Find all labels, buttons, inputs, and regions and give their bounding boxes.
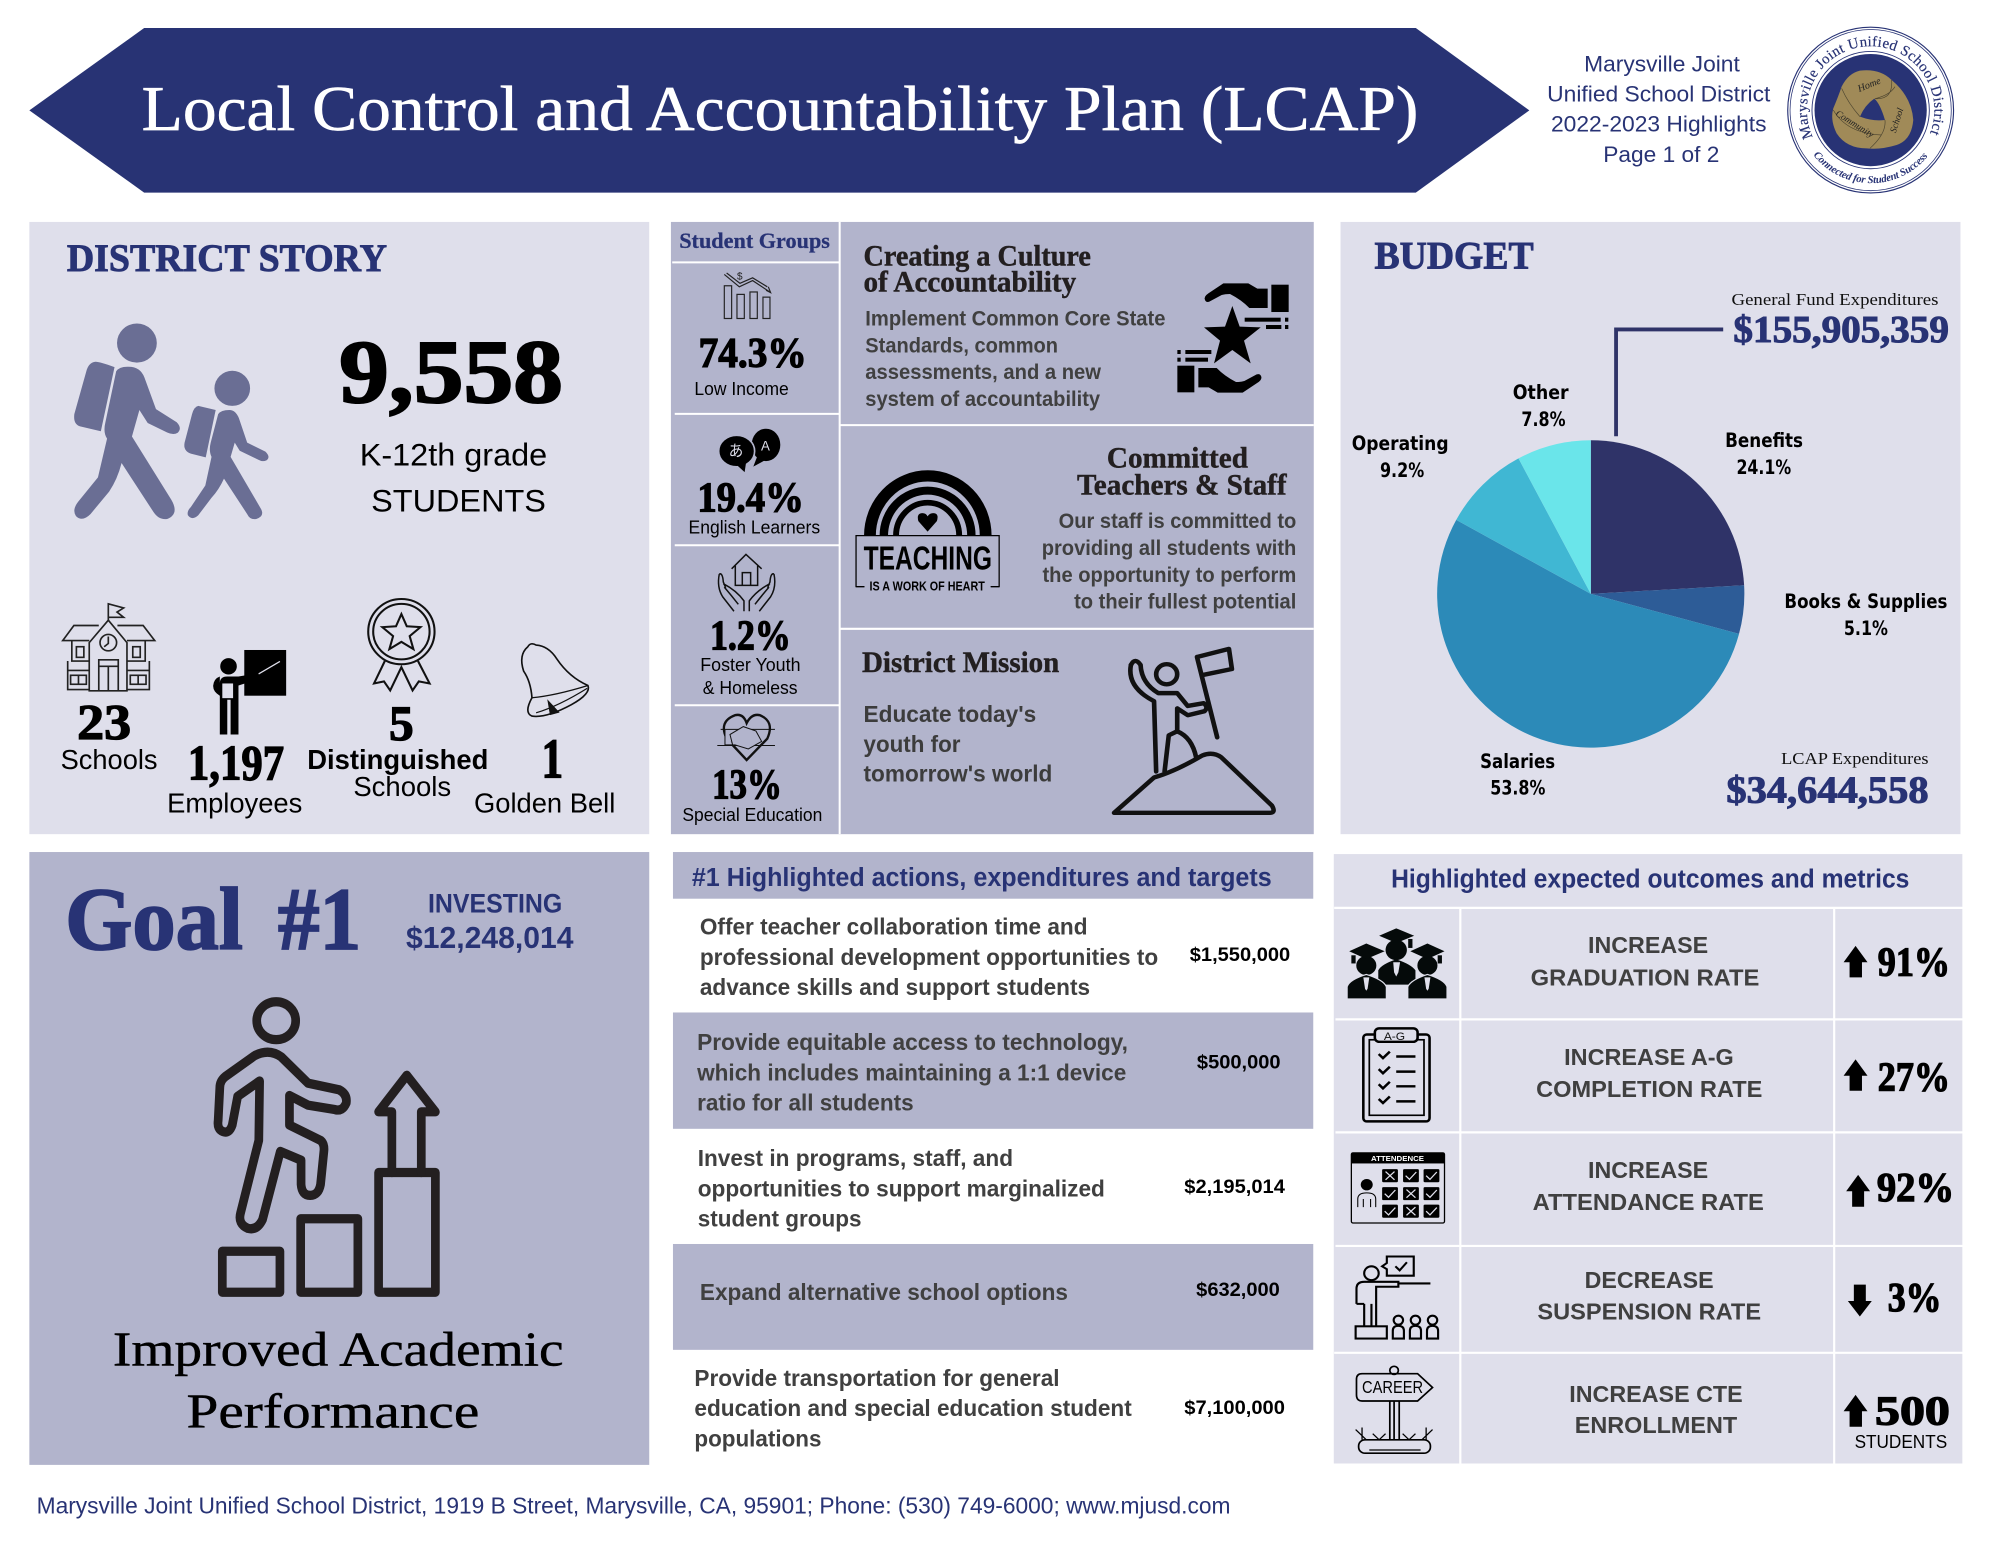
gold trefoil knot: Community — [1833, 109, 1876, 141]
icon: career signpost — [1356, 1366, 1433, 1453]
panel: district story — [29, 222, 649, 834]
metric: attendance rate: ATTENDANCE RATE — [1533, 1189, 1764, 1215]
action row 1: advance skills and support students — [700, 974, 1090, 1000]
block: culture of accountability — [864, 240, 1165, 411]
lcap expenditures — [1726, 749, 1929, 811]
action row 4: Expand alternative school options — [700, 1279, 1068, 1305]
action row 1: Offer teacher collaboration time and — [700, 913, 1087, 939]
stat: total students: 9,558 — [339, 321, 563, 422]
pie labels: Other — [1513, 381, 1569, 404]
lcap expenditures: LCAP Expenditures — [1781, 749, 1929, 768]
action row 5 — [694, 1365, 1285, 1451]
icon: climber with flag on mountain — [1114, 649, 1274, 813]
lcap expenditures: $34,644,558 — [1726, 769, 1929, 811]
action row 4 — [673, 1244, 1313, 1350]
icon: teaching is a work of heart: IS A WORK OF HEART — [870, 579, 985, 593]
stat: special education: Special Education — [682, 804, 822, 825]
block: district mission: youth for — [864, 731, 961, 757]
general fund expenditures: General Fund Expenditures — [1731, 290, 1939, 309]
goal heading: Goal — [65, 870, 243, 969]
pie labels: 53.8% — [1490, 777, 1545, 800]
stat: golden bell: Golden Bell — [474, 787, 615, 818]
stat: total students: STUDENTS — [371, 483, 546, 519]
stat: distinguished schools: Distinguished — [307, 744, 488, 775]
district name block: 2022-2023 Highlights — [1551, 111, 1767, 136]
pie chart: expenditures — [1437, 440, 1744, 748]
icon: language speech bubbles — [719, 429, 780, 472]
stat: schools — [61, 695, 158, 775]
district name block: Unified School District — [1547, 81, 1770, 106]
panel: student groups and commitments — [671, 222, 1314, 834]
stat: foster youth and homeless: 1.2% — [710, 613, 791, 660]
block: culture of accountability: assessments, and a new — [865, 361, 1102, 384]
pie labels: 7.8% — [1521, 408, 1566, 431]
action row 2: which includes maintaining a 1:1 device — [696, 1060, 1126, 1086]
block: culture of accountability: Creating a Culture — [864, 240, 1091, 272]
value: 91 percent up — [1844, 940, 1950, 985]
action row 2 — [673, 1012, 1313, 1129]
panel: budget — [1341, 222, 1960, 834]
heading: budget: BUDGET — [1374, 233, 1534, 277]
block: district mission — [862, 647, 1059, 786]
metric: graduation rate: INCREASE — [1588, 932, 1708, 958]
action row 2: Provide equitable access to technology, — [697, 1029, 1128, 1055]
actions heading bar — [673, 852, 1313, 899]
icon: low income chart: $ — [737, 271, 743, 283]
stat: special education — [682, 761, 822, 825]
block: committed teachers and staff: Our staff is committed to — [1059, 510, 1296, 533]
metric: attendance rate — [1533, 1157, 1764, 1215]
stat: low income: Low Income — [694, 378, 789, 399]
block: culture of accountability: Standards, common — [865, 334, 1058, 357]
pie labels: 5.1% — [1844, 617, 1888, 640]
actions heading bar: #1 Highlighted actions, expenditures and targets — [692, 864, 1272, 892]
stat: total students — [339, 321, 563, 519]
value: 500 students up — [1844, 1389, 1950, 1452]
goal description — [113, 1324, 564, 1438]
metric: a-g completion rate — [1536, 1044, 1762, 1102]
block: committed teachers and staff: Teachers & Staff — [1077, 469, 1288, 501]
pie labels: Operating — [1352, 432, 1449, 455]
block: committed teachers and staff: providing all students with — [1042, 537, 1296, 560]
district seal logo: Connected for Student Success — [1814, 152, 1927, 184]
title: Local Control and Accountability Plan (LCAP) — [142, 73, 1418, 144]
icon: school building — [63, 604, 155, 691]
metric: attendance rate: INCREASE — [1588, 1157, 1708, 1183]
block: district mission: District Mission — [862, 647, 1059, 679]
stat: low income: 74.3% — [699, 330, 807, 377]
stat: employees: Employees — [167, 787, 302, 818]
stat: distinguished schools — [307, 696, 488, 802]
stat: employees: 1,197 — [188, 735, 284, 790]
gold trefoil knot — [1832, 70, 1913, 149]
value: 92 percent up — [1846, 1165, 1954, 1210]
metric: suspension rate — [1537, 1267, 1761, 1324]
stat: english learners: English Learners — [689, 517, 820, 538]
value: 500 students up: STUDENTS — [1855, 1431, 1947, 1452]
block: committed teachers and staff: the opportunity to perform — [1042, 564, 1296, 587]
block: culture of accountability: system of accountability — [865, 388, 1100, 411]
icon: a-g checklist clipboard: A-G — [1384, 1030, 1405, 1043]
metric: cte enrollment: ENROLLMENT — [1575, 1412, 1737, 1438]
icon: person climbing steps — [218, 1002, 435, 1292]
action row 5: $7,100,000 — [1184, 1397, 1285, 1419]
action row 3: $2,195,014 — [1184, 1176, 1285, 1198]
district name block — [1547, 51, 1770, 167]
stat: schools: 23 — [77, 695, 131, 750]
pie labels: 9.2% — [1380, 459, 1424, 482]
pie labels — [1352, 381, 1947, 800]
action row 3: Invest in programs, staff, and — [698, 1145, 1013, 1171]
action row 5: Provide transportation for general — [694, 1365, 1060, 1391]
icon: teaching is a work of heart — [856, 476, 999, 593]
stat: foster youth and homeless: & Homeless — [703, 677, 798, 698]
stat: english learners: 19.4% — [697, 474, 804, 521]
panel: goal 1 — [29, 852, 649, 1465]
stat: foster youth and homeless: Foster Youth — [700, 654, 801, 675]
footer contact line: Marysville Joint Unified School District, 1919 B Street, Marysville, CA, 95901; Phone: (530) 749-6000; www.mjusd.com — [37, 1493, 1230, 1519]
block: district mission: tomorrow's world — [864, 760, 1052, 786]
header banner — [29, 28, 1529, 193]
icon: heart and handshake — [717, 715, 775, 760]
block: culture of accountability: Implement Common Core State — [865, 308, 1165, 331]
stat: employees — [167, 735, 302, 818]
stat: foster youth and homeless — [700, 613, 801, 698]
panel: outcomes and metrics — [1334, 854, 1963, 1463]
icon: low income chart — [724, 271, 771, 318]
panel: highlighted actions — [673, 852, 1313, 1451]
general fund expenditures — [1731, 290, 1949, 351]
district name block: Marysville Joint — [1584, 51, 1740, 76]
action row 3 — [698, 1145, 1285, 1232]
value: 3 percent down: 3% — [1888, 1275, 1941, 1320]
icon: attendance calendar: ATTENDENCE — [1371, 1154, 1424, 1163]
icon: instructor with students — [1356, 1257, 1438, 1339]
icon: teacher at board — [213, 650, 286, 734]
general fund expenditures: $155,905,359 — [1733, 309, 1949, 351]
investing amount — [406, 889, 574, 955]
value: 27 percent up — [1844, 1055, 1950, 1100]
district seal logo: Marysville Joint Unified School District — [1799, 36, 1944, 140]
goal heading: #1 — [278, 870, 361, 969]
value: 500 students up: 500 — [1875, 1389, 1950, 1434]
stat: golden bell — [474, 728, 615, 818]
investing amount: $12,248,014 — [406, 922, 574, 955]
district seal logo — [1787, 26, 1954, 194]
pie labels: Benefits — [1725, 429, 1803, 452]
stat: total students: K-12th grade — [360, 437, 547, 473]
stat: golden bell: 1 — [541, 728, 563, 790]
value: 27 percent up: 27% — [1878, 1055, 1950, 1100]
icon: career signpost: CAREER — [1362, 1377, 1423, 1397]
pie labels: 24.1% — [1736, 456, 1791, 479]
metric: graduation rate: GRADUATION RATE — [1531, 964, 1759, 990]
icon: house in hands — [718, 554, 775, 611]
icon: language speech bubbles: A — [761, 439, 771, 454]
icon: language speech bubbles: あ — [729, 443, 743, 460]
action row 1: professional development opportunities to — [700, 944, 1158, 970]
block: committed teachers and staff — [1042, 442, 1296, 614]
action row 2: $500,000 — [1197, 1052, 1281, 1074]
value: 92 percent up: 92% — [1877, 1165, 1954, 1210]
action row 2: ratio for all students — [697, 1090, 914, 1116]
stat: distinguished schools: 5 — [389, 696, 414, 751]
pie labels: Salaries — [1480, 750, 1555, 773]
metric: a-g completion rate: COMPLETION RATE — [1536, 1076, 1762, 1102]
action row 1: $1,550,000 — [1190, 944, 1290, 966]
outcomes heading: Highlighted expected outcomes and metrics — [1391, 865, 1909, 893]
metric: cte enrollment: INCREASE CTE — [1569, 1381, 1743, 1407]
callout line — [1616, 329, 1723, 436]
stat: english learners — [689, 474, 820, 538]
gold trefoil knot: Home — [1855, 75, 1883, 95]
district name block: Page 1 of 2 — [1603, 142, 1719, 167]
metric: suspension rate: DECREASE — [1585, 1267, 1714, 1293]
block: committed teachers and staff: to their fullest potential — [1074, 591, 1296, 614]
icon: graduates — [1347, 928, 1447, 999]
icon: teaching is a work of heart: TEACHING — [864, 540, 992, 577]
icon: golden bell — [522, 644, 588, 716]
heading: student groups: Student Groups — [679, 229, 830, 253]
stat: low income — [694, 330, 807, 399]
icon: a-g checklist clipboard — [1363, 1028, 1430, 1121]
icon: star between hands — [1177, 283, 1289, 393]
goal heading — [65, 870, 361, 969]
action row 3: student groups — [698, 1206, 861, 1232]
goal description: Improved Academic — [113, 1324, 564, 1377]
pie labels: Books & Supplies — [1784, 590, 1947, 613]
stat: distinguished schools: Schools — [353, 771, 451, 802]
investing amount: INVESTING — [428, 889, 562, 919]
metric: graduation rate — [1531, 932, 1759, 990]
action row 5: education and special education student — [694, 1395, 1132, 1421]
stat: schools: Schools — [61, 744, 158, 775]
value: 91 percent up: 91% — [1878, 940, 1950, 985]
block: committed teachers and staff: Committed — [1107, 442, 1248, 474]
goal description: Performance — [186, 1385, 479, 1438]
icon: walking students — [74, 323, 268, 519]
icon: attendance calendar — [1351, 1153, 1445, 1223]
value: 3 percent down — [1848, 1275, 1941, 1320]
metric: suspension rate: SUSPENSION RATE — [1537, 1298, 1761, 1324]
gold trefoil knot: School — [1889, 107, 1906, 134]
block: district mission: Educate today's — [864, 701, 1036, 727]
heading: district story: DISTRICT STORY — [67, 236, 387, 280]
metric: cte enrollment — [1569, 1381, 1743, 1438]
block: culture of accountability: of Accountability — [864, 266, 1076, 298]
action row 4: $632,000 — [1196, 1279, 1280, 1301]
action row 5: populations — [694, 1425, 821, 1451]
metric: a-g completion rate: INCREASE A-G — [1564, 1044, 1734, 1070]
action row 1 — [700, 913, 1290, 1000]
action row 3: opportunities to support marginalized — [698, 1176, 1105, 1202]
icon: award medal — [368, 599, 435, 690]
stat: special education: 13% — [712, 761, 782, 808]
